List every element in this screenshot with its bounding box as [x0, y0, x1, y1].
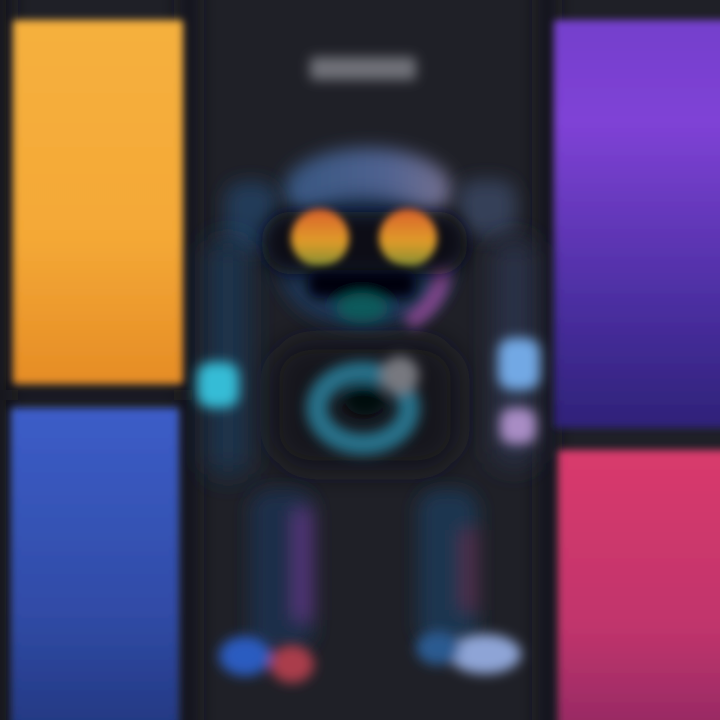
robot mouth [308, 270, 416, 323]
robot torso shadow [270, 340, 460, 470]
robot chest [317, 356, 419, 444]
robot hand right [498, 338, 540, 444]
robot [197, 148, 540, 683]
robot eye right [379, 209, 437, 267]
dark bands beside panels [0, 0, 556, 720]
title [310, 57, 416, 80]
panel: orange [13, 20, 183, 384]
robot ears [225, 180, 516, 252]
robot foot left [219, 636, 314, 683]
robot head [277, 148, 453, 330]
robot leg right [418, 490, 478, 645]
robot cheek accent [408, 258, 441, 324]
robot hand left [197, 362, 239, 408]
robot arm left [208, 240, 248, 475]
robot arm right [494, 240, 534, 465]
panel: pink [558, 450, 720, 720]
panel: blue [11, 408, 179, 720]
robot leg left [250, 490, 314, 650]
panel: purple [554, 20, 720, 428]
robot foot right [416, 631, 521, 674]
robot eye sockets [262, 212, 467, 274]
robot eye left [291, 209, 349, 267]
